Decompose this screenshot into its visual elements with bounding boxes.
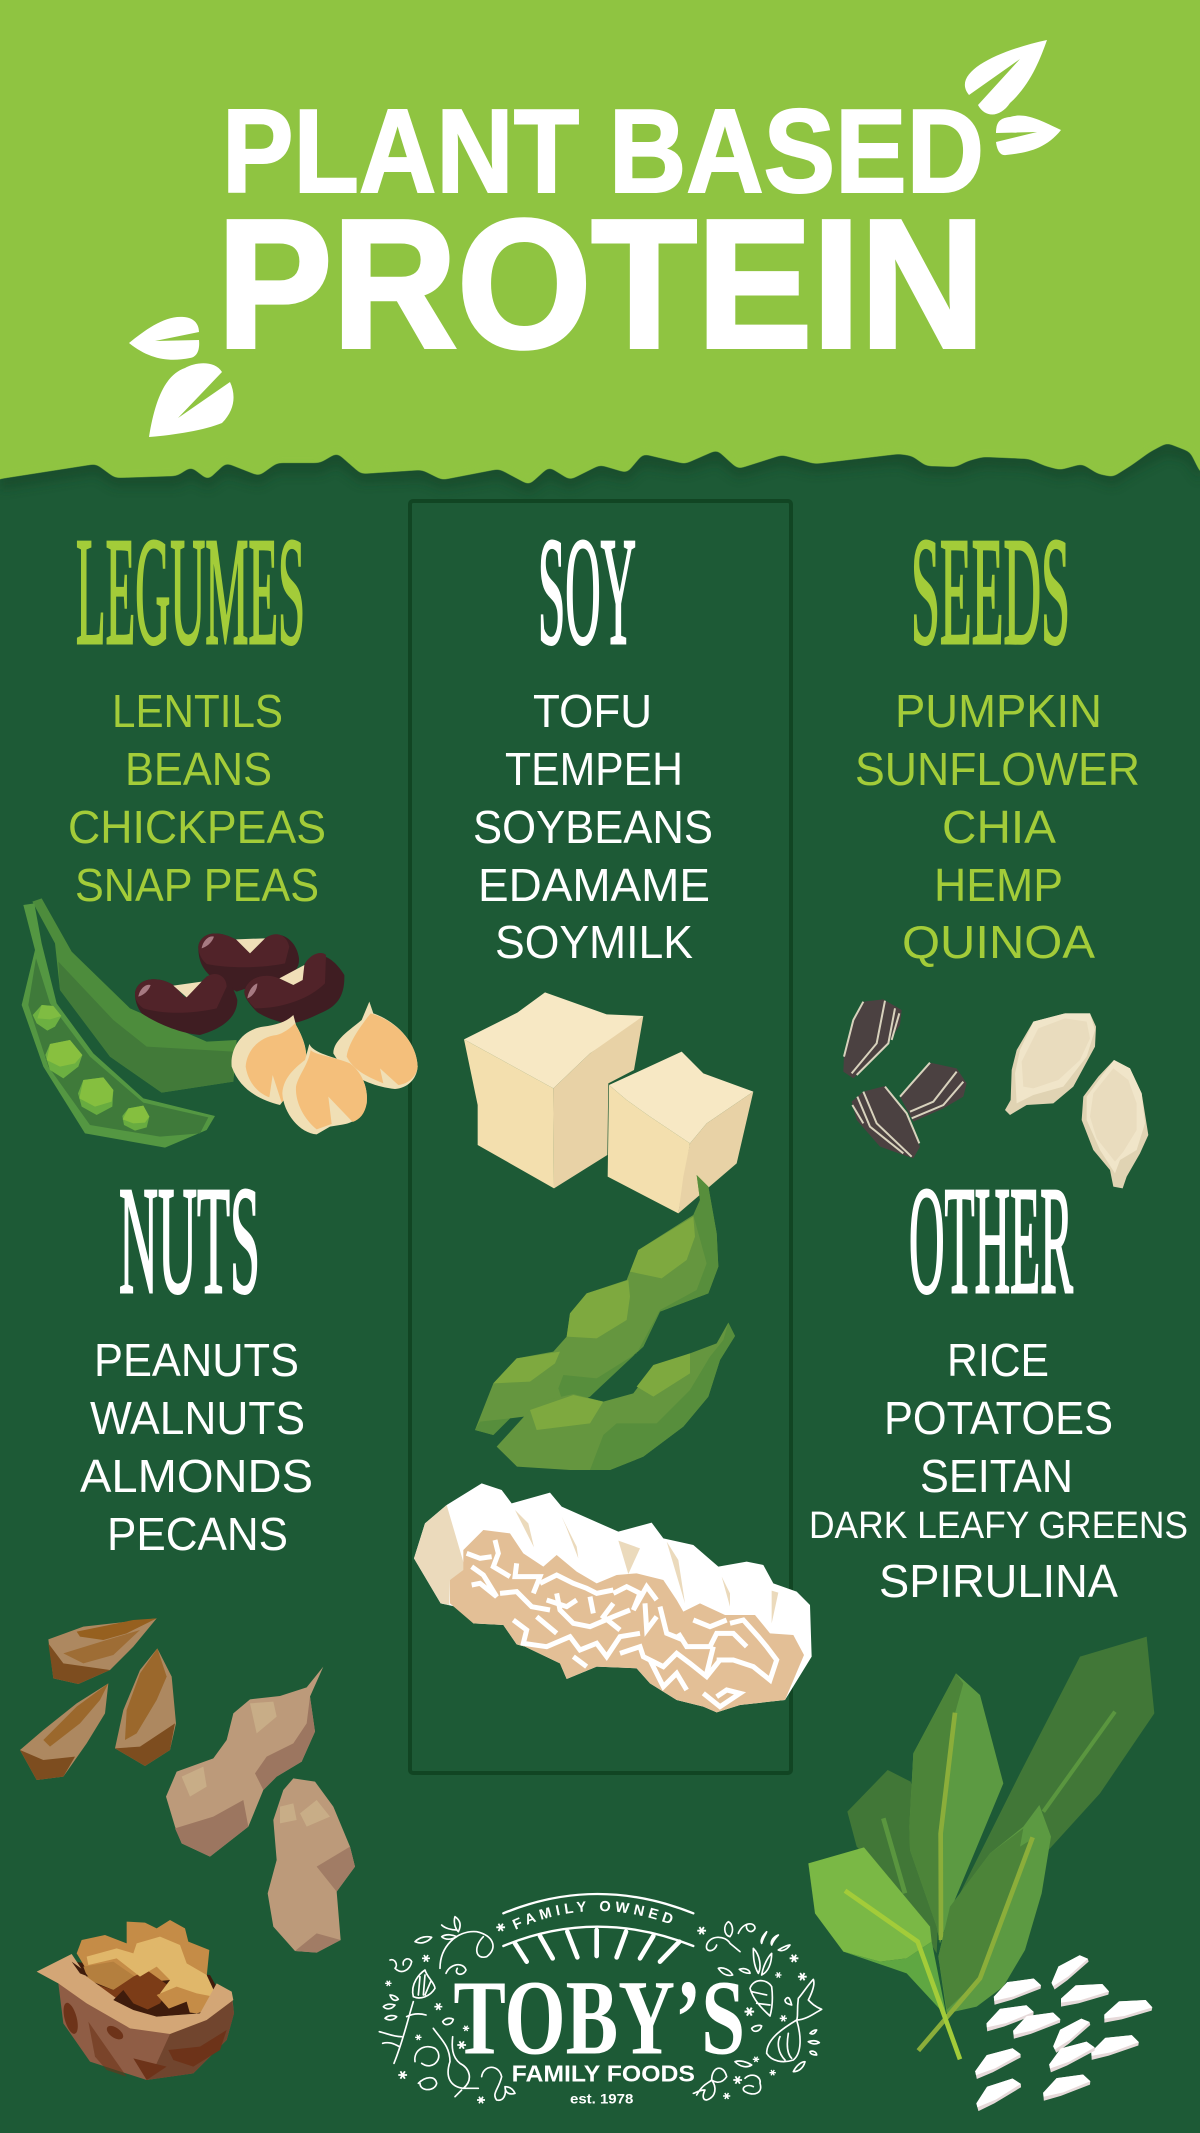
- icon: tofu cubes: [464, 992, 753, 1213]
- list: soy: TOFU: [533, 685, 652, 737]
- chickpeas: [231, 1002, 418, 1134]
- list: seeds: [855, 685, 1140, 968]
- large tofu cube: [464, 992, 643, 1188]
- tempeh soybeans: [450, 1530, 804, 1712]
- panel: nuts: [20, 1156, 355, 2080]
- tempeh block: [414, 1483, 812, 1712]
- right leaf: [918, 1805, 1051, 2051]
- logo: Toby's Family Foods: [378, 1892, 822, 2106]
- logo arcs and rays: [503, 1894, 693, 1962]
- title line two: PROTEIN: [217, 181, 985, 386]
- title: [217, 85, 985, 386]
- list: soy: SOYBEANS: [473, 801, 713, 853]
- icon: nuts: [20, 1618, 355, 2080]
- logo: est. 1978: est. 1978: [570, 2090, 634, 2106]
- list: nuts: PECANS: [107, 1508, 288, 1560]
- logo: family foods: FAMILY FOODS: [512, 2061, 695, 2087]
- panel: other: [808, 1156, 1188, 2111]
- tempeh cut end: [414, 1505, 467, 1605]
- icon: seeds: [843, 999, 1148, 1188]
- logo flourishes: [379, 1917, 822, 2100]
- list: other: SEITAN: [920, 1450, 1073, 1502]
- title line one: PLANT BASED: [222, 85, 984, 218]
- peanuts: [166, 1667, 355, 1953]
- list: nuts: [80, 1334, 313, 1560]
- list: other: POTATOES: [884, 1392, 1113, 1444]
- walnut: [37, 1920, 234, 2080]
- logo stars: [385, 1924, 807, 2103]
- center leaf: [909, 1673, 1003, 1943]
- icon: rice: [972, 1953, 1152, 2111]
- tempeh white cracks: [467, 1540, 777, 1707]
- list: other: [809, 1334, 1188, 1607]
- infographic canvas: LEGUMES: [76, 507, 305, 677]
- lower edamame pod: [497, 1323, 735, 1470]
- icon: leaves bottom left: [129, 317, 234, 437]
- panel: seeds: [843, 507, 1148, 1188]
- pumpkin seeds: [1005, 1013, 1148, 1188]
- list: legumes: [68, 685, 326, 911]
- list: seeds: SUNFLOWER: [855, 743, 1140, 795]
- icon: tempeh: [414, 1483, 812, 1712]
- panel: legumes: [22, 507, 418, 1148]
- list: soy: TEMPEH: [505, 743, 683, 795]
- peas: [33, 1005, 149, 1131]
- list: seeds: PUMPKIN: [895, 685, 1102, 737]
- list: nuts: WALNUTS: [90, 1392, 305, 1444]
- list: soy: [473, 685, 713, 968]
- list: legumes: CHICKPEAS: [68, 801, 326, 853]
- header wave shadow: [0, 440, 1200, 494]
- logo: toby's: TOBY’S: [453, 1959, 745, 2077]
- list: seeds: CHIA: [942, 801, 1056, 853]
- back leaves: [847, 1637, 1154, 1953]
- list: soy: SOYMILK: [495, 916, 693, 968]
- kidney beans: [135, 933, 344, 1035]
- list: seeds: QUINOA: [902, 916, 1095, 968]
- list: legumes: LENTILS: [112, 685, 283, 737]
- list: nuts: PEANUTS: [94, 1334, 299, 1386]
- small tofu cube: [608, 1052, 753, 1213]
- list: legumes: BEANS: [125, 743, 272, 795]
- soy panel border: [410, 501, 791, 1773]
- front pea pod: [22, 903, 215, 1148]
- icon: edamame pods: [475, 1175, 735, 1470]
- front leaf: [808, 1847, 960, 2059]
- icon: leafy greens: [808, 1637, 1154, 2059]
- panel: soy: [414, 507, 812, 1712]
- list: other: RICE: [947, 1334, 1049, 1386]
- upper edamame pod: [475, 1175, 718, 1435]
- tempeh flecks: [515, 1510, 778, 1623]
- icon: beans, peas, chickpeas: [22, 898, 418, 1148]
- panel: nuts: NUTS: [119, 1156, 260, 1326]
- logo: family owned: FAMILY OWNED: [512, 1900, 672, 1930]
- panel: soy: SOY: [538, 507, 636, 677]
- icon: leaves top right: [965, 40, 1061, 155]
- list: nuts: ALMONDS: [80, 1450, 313, 1502]
- list: other: SPIRULINA: [879, 1555, 1118, 1607]
- header band: [0, 0, 1200, 490]
- list: legumes: SNAP PEAS: [75, 859, 319, 911]
- almonds: [20, 1618, 176, 1780]
- list: seeds: HEMP: [934, 859, 1063, 911]
- back pea pod: [32, 898, 237, 1093]
- list: soy: EDAMAME: [478, 859, 710, 911]
- sunflower seeds: [843, 999, 967, 1158]
